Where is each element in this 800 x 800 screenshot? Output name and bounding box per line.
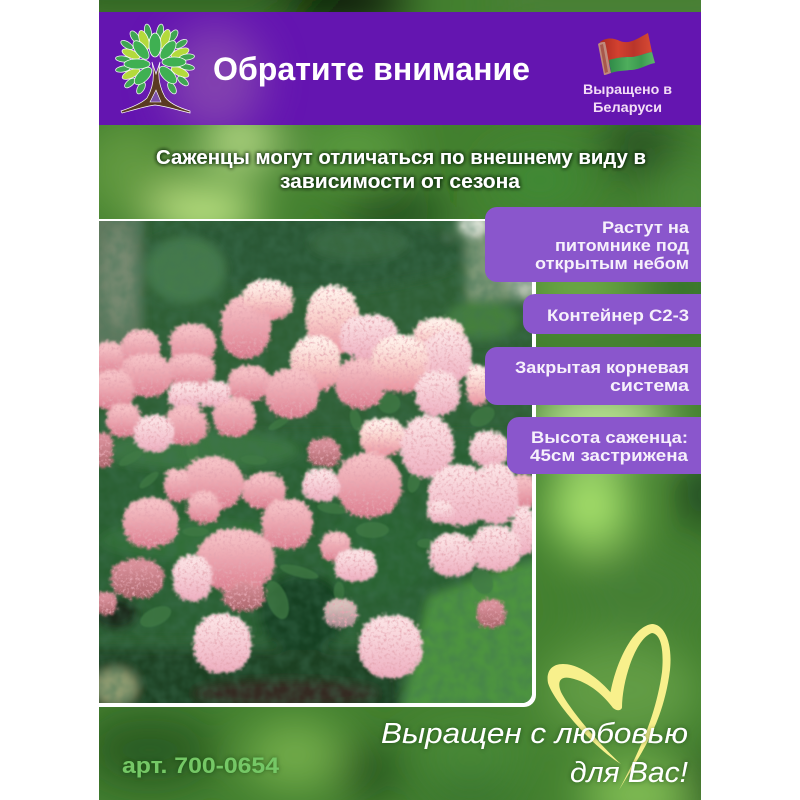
background: green bokeh [99, 0, 701, 800]
slogan: для Вас! [570, 757, 688, 789]
title: Обратите внимание [213, 51, 530, 87]
panel: grown outdoors: Растут на [602, 218, 690, 237]
panel: closed root system: система [610, 376, 690, 395]
panel: grown outdoors: питомнике под [555, 236, 689, 255]
notice text [156, 146, 646, 193]
logo: tree [115, 24, 195, 113]
slogan [381, 718, 688, 789]
panel: seedling height: 45см застрижена [530, 446, 689, 465]
icon: yellow heart [548, 624, 671, 790]
panel: grown outdoors [485, 207, 701, 282]
label: grown in Belarus: Беларуси [593, 100, 662, 115]
panel: seedling height: Высота саженца: [531, 428, 688, 447]
label: grown in Belarus [583, 82, 672, 115]
panel: container [523, 294, 701, 334]
article number: арт. 700-0654 [122, 753, 280, 778]
label: grown in Belarus: Выращено в [583, 82, 672, 97]
panel: container: Контейнер С2-3 [547, 306, 689, 325]
photo: hydrangea bush [99, 221, 532, 703]
panel: closed root system: Закрытая корневая [515, 358, 689, 377]
panel: grown outdoors: открытым небом [535, 254, 689, 273]
notice text: Саженцы могут отличаться по внешнему виду в [156, 146, 646, 169]
photo frame [99, 219, 536, 707]
panel: closed root system [485, 347, 701, 405]
icon: Belarus flag [598, 33, 655, 75]
panel: seedling height [507, 417, 701, 474]
header band [99, 12, 701, 135]
notice text: зависимости от сезона [280, 170, 521, 193]
slogan: Выращен с любовью [381, 718, 688, 750]
